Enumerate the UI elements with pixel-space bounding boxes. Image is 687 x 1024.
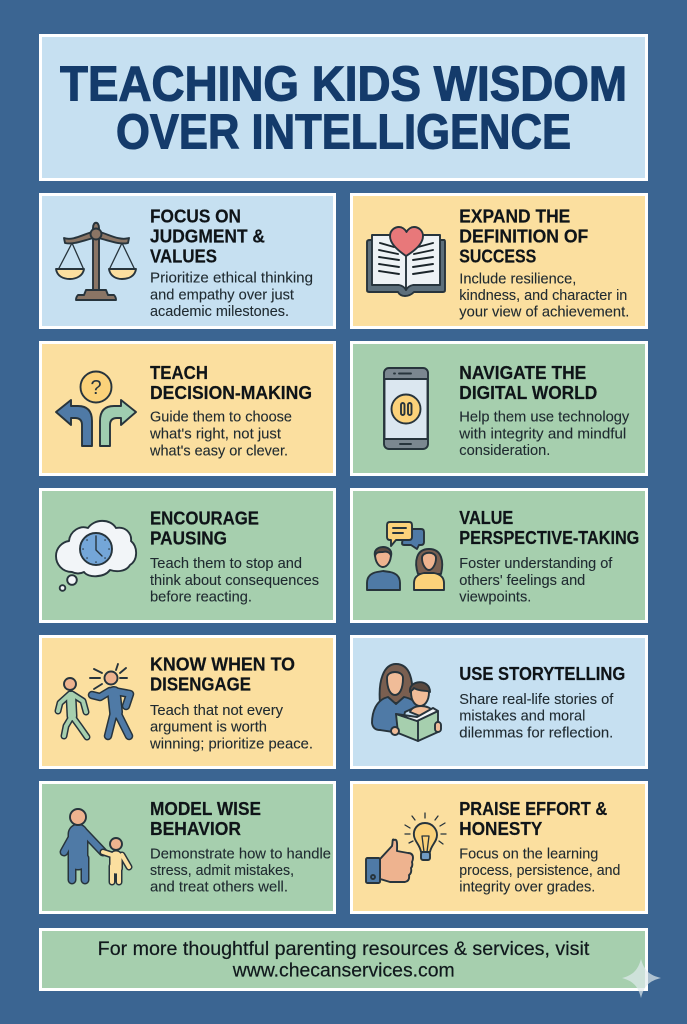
panel: teach decision-making — [40, 342, 334, 474]
panel: know when to disengage: argument is worth — [150, 720, 267, 736]
panel: navigate the digital world: NAVIGATE THE — [459, 362, 586, 383]
panel: value perspective-taking: viewpoints. — [459, 590, 531, 606]
panel: value perspective-taking: VALUE — [459, 507, 513, 528]
panel: teach decision-making: Guide them to choose — [150, 410, 292, 426]
icon: open book with heart — [367, 227, 445, 296]
panel: expand the definition of success: EXPAND THE — [459, 206, 570, 226]
panel: focus on judgment and values: JUDGMENT & — [150, 226, 265, 246]
panel: navigate the digital world: DIGITAL WORLD — [459, 382, 597, 403]
icon: thumbs up and light bulb — [366, 813, 446, 883]
panel: value perspective-taking: others' feelings and — [459, 573, 585, 589]
title banner — [40, 36, 646, 180]
panel: know when to disengage: KNOW WHEN TO — [150, 654, 295, 675]
panel: know when to disengage: DISENGAGE — [150, 674, 251, 695]
panel: use storytelling: USE STORYTELLING — [459, 663, 625, 684]
panel: praise effort and honesty — [352, 782, 646, 912]
icon: parent reading a book with child — [372, 664, 441, 741]
panel: use storytelling: dilemmas for reflection. — [459, 725, 613, 741]
panel: encourage pausing: Teach them to stop and — [150, 556, 302, 572]
panel: praise effort and honesty: Focus on the learning — [459, 846, 598, 862]
panel: navigate the digital world — [352, 342, 646, 474]
panel: praise effort and honesty: PRAISE EFFORT & — [459, 798, 607, 819]
panel: teach decision-making: what's easy or clever. — [149, 444, 288, 460]
panel: navigate the digital world: Help them use technology — [459, 410, 630, 426]
panel: focus on judgment and values: and empathy over just — [150, 287, 294, 303]
icon: thought cloud with clock — [56, 521, 136, 591]
panel: expand the definition of success: SUCCESS — [459, 246, 536, 266]
panel: expand the definition of success — [352, 194, 646, 328]
panel: model wise behavior: and treat others well. — [150, 880, 288, 896]
panel: encourage pausing: think about consequences — [150, 573, 319, 589]
panel: expand the definition of success: Include resilience, — [459, 271, 576, 287]
panel: encourage pausing: PAUSING — [150, 527, 227, 548]
icon: smartphone with pause button — [384, 368, 428, 449]
panel: teach decision-making: TEACH — [150, 362, 208, 383]
panel: praise effort and honesty: process, persistence, and — [459, 863, 620, 879]
title banner: TEACHING KIDS WISDOM — [60, 58, 627, 112]
panel: value perspective-taking — [352, 490, 646, 622]
panel: expand the definition of success: kindness, and character in — [459, 288, 627, 304]
title banner: OVER INTELLIGENCE — [116, 106, 571, 160]
icon: adult holding child's hand — [64, 809, 129, 882]
panel: teach decision-making: DECISION-MAKING — [150, 382, 312, 403]
panel: know when to disengage: winning; prioritize peace. — [149, 736, 313, 752]
footer call to action — [40, 930, 646, 990]
panel: value perspective-taking: Foster understanding of — [459, 556, 613, 572]
panel: teach decision-making: what's right, not just — [149, 426, 281, 442]
panel: praise effort and honesty: HONESTY — [459, 818, 543, 839]
panel: focus on judgment and values: academic milestones. — [150, 304, 289, 320]
panel: navigate the digital world: consideration. — [459, 443, 550, 459]
panel: navigate the digital world: with integrity and mindful — [458, 426, 626, 442]
panel: model wise behavior: MODEL WISE — [150, 798, 261, 819]
panel: know when to disengage — [40, 636, 334, 768]
panel: focus on judgment and values: VALUES — [150, 246, 217, 266]
panel: model wise behavior: stress, admit mistakes, — [150, 863, 294, 879]
panel: expand the definition of success: DEFINITION OF — [459, 226, 588, 246]
panel: focus on judgment and values: Prioritize ethical thinking — [150, 271, 313, 287]
panel: encourage pausing: ENCOURAGE — [150, 507, 259, 528]
panel: expand the definition of success: your view of achievement. — [459, 305, 629, 321]
icon: crossroads arrows with question mark — [56, 372, 136, 446]
panel: encourage pausing — [40, 490, 334, 622]
panel: focus on judgment and values — [40, 194, 334, 328]
panel: model wise behavior: BEHAVIOR — [150, 818, 242, 839]
footer call to action: For more thoughtful parenting resources & services, visit — [98, 938, 590, 960]
icon: two people with speech bubbles — [367, 522, 444, 590]
panel: use storytelling: mistakes and moral — [459, 709, 585, 725]
icon: sparkle watermark — [622, 959, 661, 998]
panel: model wise behavior — [40, 782, 334, 912]
panel: encourage pausing: before reacting. — [150, 590, 252, 606]
panel: use storytelling — [352, 636, 646, 768]
footer call to action: www.checanservices.com — [232, 960, 455, 982]
icon: balance scale — [56, 223, 136, 300]
icon: person walking away from angry person — [58, 664, 130, 737]
panel: praise effort and honesty: integrity over grades. — [459, 880, 595, 896]
panel: know when to disengage: Teach that not every — [150, 703, 284, 719]
panel: value perspective-taking: PERSPECTIVE-TAKING — [459, 527, 639, 548]
panel: model wise behavior: Demonstrate how to handle — [150, 846, 331, 862]
icon: crossroads arrows with question mark: ? — [90, 377, 102, 399]
panel: focus on judgment and values: FOCUS ON — [150, 206, 241, 226]
panel: use storytelling: Share real-life stories of — [459, 692, 614, 708]
